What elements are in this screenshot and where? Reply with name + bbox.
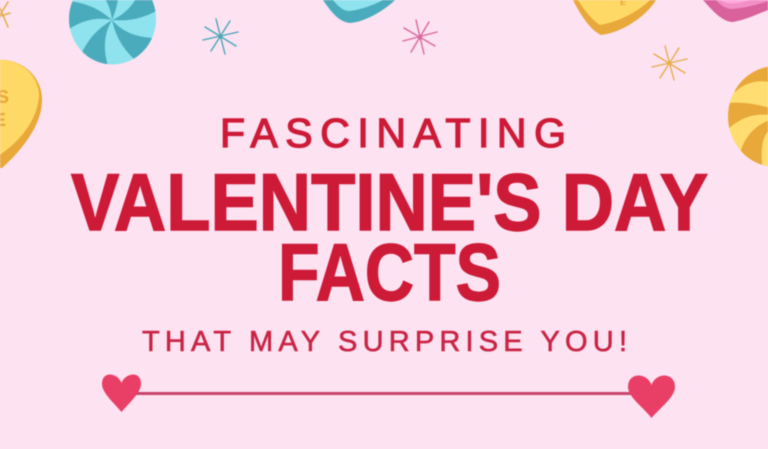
- icon: right heart: [628, 375, 675, 418]
- title line: VALENTINE'S DAY: VALENTINE'S DAY: [71, 158, 708, 248]
- icon: teal star: [203, 19, 238, 54]
- title line: FACTS: FACTS: [278, 228, 501, 318]
- divider line with hearts: [102, 374, 675, 418]
- icon: partial orange star top left: [0, 2, 10, 27]
- icon: orange star: [652, 46, 687, 80]
- icon: yellow candy heart left: [0, 60, 42, 168]
- icon: yellow candy heart top right: [573, 0, 656, 35]
- icon: blue candy heart top: [323, 0, 395, 23]
- icon: pink star: [403, 20, 437, 54]
- title line: FASCINATING: FASCINATING: [220, 110, 566, 156]
- icon: yellow swirl candy right: [727, 66, 768, 167]
- icon: blue swirl candy: [68, 0, 157, 66]
- subtitle: THAT MAY SURPRISE YOU!: [142, 326, 627, 358]
- icon: left heart: [102, 374, 141, 412]
- icon: pink candy heart top right: [703, 0, 768, 22]
